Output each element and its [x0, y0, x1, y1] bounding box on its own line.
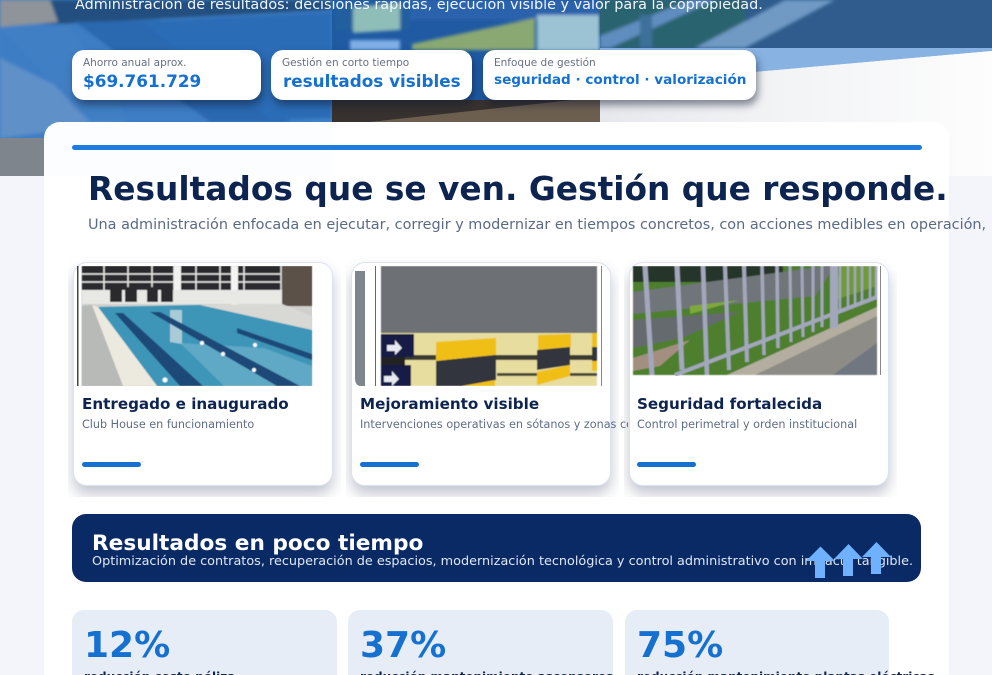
- card title: Seguridad fortalecida: [637, 395, 822, 413]
- card: mejoramiento visible: [346, 262, 618, 497]
- main white panel: [44, 122, 949, 675]
- photo: tuberías: [355, 266, 602, 386]
- photo: cerramiento: [632, 266, 881, 376]
- KPI card: gestión en corto tiempo: Gestión en corto tiempo: [282, 57, 409, 69]
- card: seguridad fortalecida: [624, 262, 896, 497]
- stat value: 12%: [84, 625, 170, 666]
- card accent bar: [360, 462, 419, 467]
- top accent bar: [72, 145, 922, 150]
- main heading: Resultados que se ven. Gestión que responde.: [88, 170, 948, 208]
- photo: piscina: [77, 266, 313, 386]
- stat: 37%: [348, 610, 613, 675]
- KPI card: enfoque de gestión: [483, 50, 756, 100]
- card description: Control perimetral y orden institucional: [637, 418, 857, 431]
- card accent bar: [637, 462, 696, 467]
- card title: Entregado e inaugurado: [82, 395, 289, 413]
- hero background photo collage: [0, 0, 992, 176]
- banner heading: Resultados en poco tiempo: [92, 531, 423, 556]
- KPI card: enfoque de gestión: Enfoque de gestión: [494, 57, 596, 69]
- stat value: 75%: [637, 625, 723, 666]
- KPI card: enfoque de gestión: seguridad · control · valorización: [494, 72, 746, 88]
- KPI card: gestión en corto tiempo: [271, 50, 472, 100]
- stat value: 37%: [360, 625, 446, 666]
- banner: resultados en poco tiempo: [72, 514, 921, 582]
- stat: 12%: [72, 610, 337, 675]
- KPI card: gestión en corto tiempo: resultados visibles: [283, 71, 461, 91]
- KPI card: ahorro anual: $69.761.729: [83, 71, 201, 91]
- stat: 75%: [625, 610, 889, 675]
- intro text: Una administración enfocada en ejecutar, corregir y modernizar en tiempos concretos, con acciones medibles en operación,: [88, 217, 986, 233]
- icon: three rising arrows: [806, 542, 891, 578]
- card title: Mejoramiento visible: [360, 395, 539, 413]
- banner text: Optimización de contratos, recuperación de espacios, modernización tecnológica y control administrativo con impacto tangible.: [92, 554, 913, 569]
- card description: Club House en funcionamiento: [82, 418, 254, 431]
- KPI card: ahorro anual: [72, 50, 261, 100]
- card: entregado e inaugurado: [68, 262, 340, 497]
- KPI card: ahorro anual: Ahorro anual aprox.: [83, 57, 187, 69]
- card accent bar: [82, 462, 141, 467]
